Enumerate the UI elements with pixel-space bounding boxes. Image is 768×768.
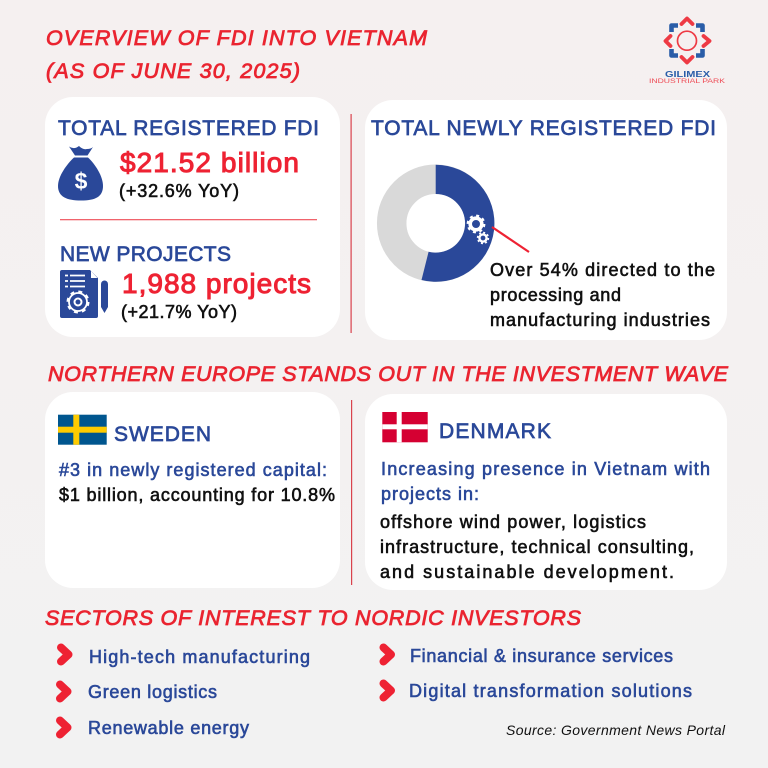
title: OVERVIEW OF FDI INTO VIETNAM <box>46 26 427 50</box>
change: +32.6%: (+32.6% YoY) <box>119 181 239 201</box>
panel: total newly registered FDI <box>365 100 727 340</box>
heading: new projects: NEW PROJECTS <box>60 243 231 266</box>
text: Denmark sectors: infrastructure, technical consulting, <box>380 537 694 557</box>
heading: Sweden: SWEDEN <box>114 423 211 446</box>
change: +21.7%: (+21.7% YoY) <box>121 302 237 322</box>
icon: Sweden flag <box>58 415 107 445</box>
source note: Source: Government News Portal <box>506 722 726 738</box>
callout text: Over 54% directed to the <box>490 260 715 280</box>
panel: Sweden <box>45 392 340 588</box>
text: Denmark presence <box>381 459 710 504</box>
heading: Northern Europe: NORTHERN EUROPE STANDS OUT IN THE INVESTMENT WAVE <box>48 362 729 386</box>
text: Sweden ranking: #3 in newly registered capital: <box>59 460 327 480</box>
text: Denmark presence: Increasing presence in Vietnam with <box>381 459 710 479</box>
list: sectors left column: Green logistics <box>88 682 217 702</box>
callout text: manufacturing industries <box>490 310 710 330</box>
heading: Denmark: DENMARK <box>439 420 551 443</box>
icon: money bag: $ <box>75 168 88 194</box>
text: Denmark presence: projects in: <box>381 484 479 504</box>
arrow: callout line <box>492 227 529 252</box>
heading: sectors of interest: SECTORS OF INTEREST TO NORDIC INVESTORS <box>45 606 582 630</box>
icon: Denmark flag <box>382 412 428 442</box>
text: Denmark sectors <box>380 512 694 582</box>
list: sectors right column <box>384 646 692 701</box>
callout text: processing and <box>490 285 621 305</box>
list: sectors left column: Renewable energy <box>88 718 249 738</box>
logo: Gilimex Industrial Park <box>649 18 726 85</box>
icon: gears <box>468 216 488 243</box>
logo: Gilimex Industrial Park: GILIMEX <box>665 70 711 79</box>
text: Sweden ranking: $1 billion, accounting for 10.8% <box>59 485 335 505</box>
title: (AS OF JUNE 30, 2025) <box>46 59 300 83</box>
logo: Gilimex Industrial Park: INDUSTRIAL PARK <box>649 78 726 85</box>
list: sectors right column: Digital transformation solutions <box>409 681 692 701</box>
donut chart: 54% processing and manufacturing <box>392 165 494 282</box>
list: sectors right column: Financial & insurance services <box>410 646 673 666</box>
callout text <box>490 260 715 330</box>
icon: money bag <box>58 146 103 200</box>
text: Denmark sectors: offshore wind power, logistics <box>380 512 646 532</box>
heading: total newly registered FDI: TOTAL NEWLY REGISTERED FDI <box>371 117 716 140</box>
list: sectors left column: High-tech manufacturing <box>89 647 310 667</box>
text: Sweden ranking <box>59 460 335 505</box>
panel: Denmark <box>365 394 727 590</box>
heading: total registered FDI: TOTAL REGISTERED FDI <box>58 117 319 140</box>
value: 21.52 billion: $21.52 billion <box>120 147 299 178</box>
list: sectors left column <box>60 647 310 738</box>
icon: document with gear <box>60 270 108 318</box>
text: Denmark sectors: and sustainable development. <box>380 562 674 582</box>
panel: total registered FDI and new projects <box>45 97 340 337</box>
title <box>46 26 427 83</box>
value: 1,988 projects: 1,988 projects <box>122 268 311 299</box>
